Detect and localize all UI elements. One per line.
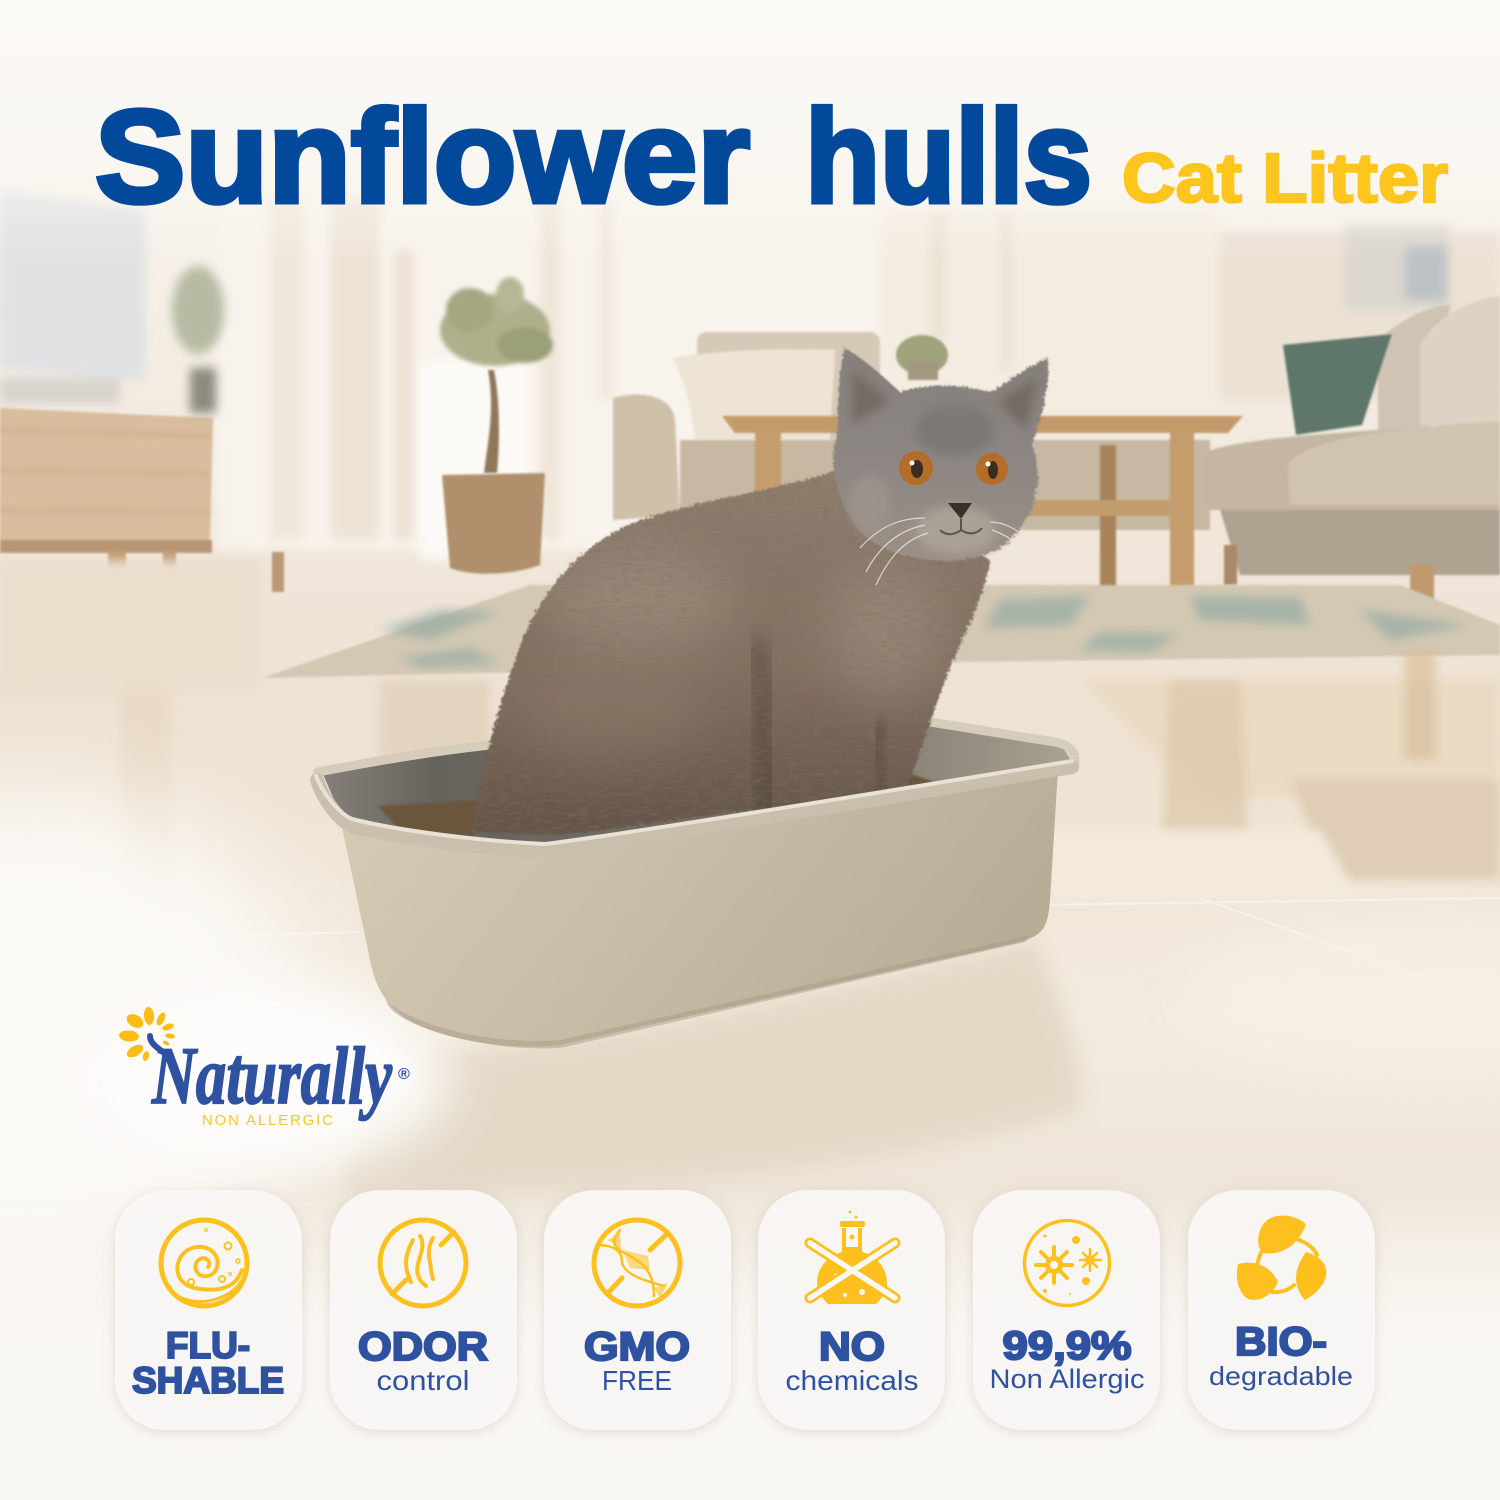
logo wordmark: Naturally [151, 1030, 392, 1121]
rear sofa [613, 332, 1210, 530]
cat nose and whiskers [860, 503, 1032, 585]
logo swoosh [150, 1036, 172, 1064]
tv cabinet [0, 408, 284, 622]
logo tagline: NON ALLERGIC [202, 1112, 333, 1129]
cat ears [852, 368, 1038, 430]
icon: no odor [380, 1220, 466, 1306]
label: biodegradable [1209, 1320, 1353, 1391]
label: biodegradable: degradable [1209, 1361, 1353, 1391]
cat eyes [899, 451, 1008, 485]
logo: Naturally Non Allergic [119, 1007, 410, 1129]
label: gmo free: FREE [602, 1365, 672, 1396]
litter box interior [318, 718, 1075, 852]
tile lines [0, 898, 1500, 1005]
label: flushable: FLU- [166, 1325, 250, 1366]
title: hulls: hulls [805, 83, 1092, 230]
card: no chemicals [758, 1190, 945, 1430]
litter box rim [316, 761, 1072, 851]
icon: spiral flush [161, 1220, 247, 1306]
card: odor control [330, 1190, 517, 1430]
cat muzzle [850, 404, 996, 554]
label: non allergic: Non Allergic [990, 1364, 1144, 1394]
litter box reflection [340, 940, 1081, 1192]
card: biodegradable [1188, 1190, 1375, 1430]
litter box back rim [318, 718, 1075, 772]
central plant [440, 277, 553, 574]
icon: no gmo [594, 1220, 680, 1306]
title: Sunflower: Sunflower [95, 83, 750, 230]
label: no chemicals [786, 1325, 918, 1396]
card: gmo free [544, 1190, 731, 1430]
label: no chemicals: NO [819, 1325, 885, 1369]
label: flushable: SHABLE [132, 1360, 284, 1401]
cat litter pellets [378, 772, 935, 836]
label: odor control: control [376, 1365, 470, 1396]
label: gmo free: GMO [584, 1325, 690, 1369]
white glow behind logo [90, 988, 450, 1168]
card: flushable [115, 1190, 302, 1430]
label: no chemicals: chemicals [786, 1365, 918, 1396]
card: non allergic [973, 1190, 1160, 1430]
label: non allergic: 99,9% [1002, 1324, 1132, 1368]
curtains [215, 200, 1500, 560]
floor reflections [0, 560, 1500, 920]
rug [262, 585, 1500, 678]
logo flower [119, 1007, 175, 1062]
icon: allergen dish [1024, 1220, 1110, 1306]
subtitle: Cat Litter: Cat Litter [1122, 139, 1448, 217]
registered mark: ® [398, 1066, 410, 1083]
label: odor control: ODOR [358, 1325, 488, 1369]
icon: recycling leaves [1237, 1215, 1326, 1300]
icon: crossed flask [810, 1210, 895, 1304]
litter box body [316, 761, 1072, 1048]
white fades [0, 0, 1500, 260]
coffee table [722, 416, 1243, 617]
label: gmo free [584, 1325, 690, 1396]
right sofa [1205, 296, 1500, 620]
label: biodegradable: BIO- [1235, 1320, 1327, 1364]
cat [470, 348, 1048, 840]
feature cards [115, 1190, 1375, 1430]
cat head [833, 348, 1048, 561]
label: odor control [358, 1325, 488, 1396]
television [0, 190, 145, 404]
label: non allergic [990, 1324, 1144, 1394]
left plant [172, 266, 224, 413]
title [95, 83, 1092, 230]
cat body [472, 470, 990, 835]
